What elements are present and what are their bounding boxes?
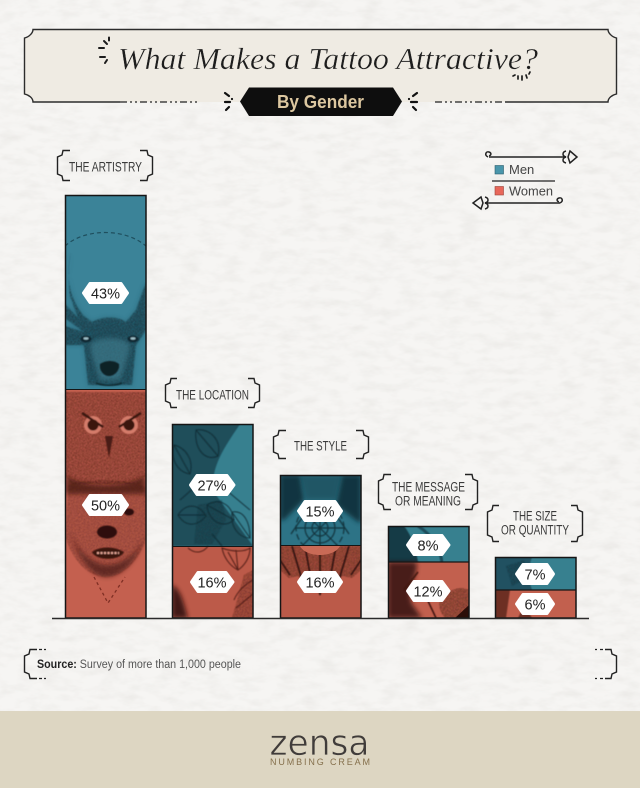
logo: zensa: zensa (270, 723, 370, 764)
title text: What Makes a Tattoo Attractive? (118, 41, 539, 76)
value label: men 8%: 8% (418, 538, 439, 554)
value label: women 50%: 50% (91, 498, 120, 514)
value label: men 43% (84, 284, 128, 302)
icon: title sparkles right (513, 72, 530, 80)
value label: women 12%: 12% (413, 584, 443, 600)
men segment 27 percent with floral tattoo (172, 424, 253, 546)
value label: men 27%: 27% (197, 478, 227, 494)
category label: the size or quantity: OR QUANTITY (501, 522, 569, 538)
icon: subtitle sparkles left (225, 93, 232, 110)
bar chart (52, 195, 589, 618)
source text: Source: Survey of more than 1,000 people (37, 659, 241, 671)
category label: the message or meaning (378, 474, 478, 510)
value label: men 15% (298, 502, 342, 520)
category label: the location: THE LOCATION (176, 388, 249, 402)
category label: the style (274, 430, 368, 458)
icon: legend top arrow (486, 151, 577, 163)
bar: the style (280, 475, 361, 618)
legend swatch: women (495, 186, 504, 195)
source box (24, 650, 616, 678)
legend label: men: Men (509, 162, 534, 177)
men segment 43 percent with deer illustration (65, 195, 146, 390)
value label: women 6%: 6% (525, 598, 546, 614)
value label: women 16% (192, 572, 233, 592)
value label: women 16%: 16% (305, 576, 335, 592)
category label: the artistry (58, 150, 152, 180)
value label: women 50% (84, 496, 128, 514)
women segment 16 percent with floral tattoo (172, 546, 253, 618)
icon: legend bottom arrow (473, 197, 562, 209)
men segment 8 percent (388, 526, 469, 562)
bar: the artistry (65, 195, 146, 618)
legend swatch: men (495, 166, 504, 174)
value label: men 27% (190, 476, 234, 494)
subtitle badge: By Gender (277, 92, 364, 112)
subtitle badge (240, 88, 402, 116)
women segment 16 percent with mandala tattoo (280, 546, 361, 618)
value label: men 7%: 7% (525, 568, 546, 584)
women segment 6 percent (495, 590, 576, 618)
icon: subtitle sparkles right (409, 93, 417, 110)
footer band (0, 711, 640, 788)
value label: women 16%: 16% (197, 576, 227, 592)
women segment 50 percent with owl and bear illustration (65, 390, 146, 618)
logo tagline: NUMBING CREAM (270, 757, 370, 767)
value label: men 15%: 15% (305, 504, 335, 520)
category label: the message or meaning: THE MESSAGE (392, 480, 465, 494)
category label: the message or meaning: OR MEANING (395, 494, 461, 508)
men segment 15 percent with mandala tattoo (281, 476, 360, 545)
value label: men 43%: 43% (91, 286, 120, 302)
women segment 12 percent (388, 562, 469, 618)
category label: the style: THE STYLE (294, 438, 347, 454)
category label: the location (166, 378, 260, 408)
legend divider (492, 180, 555, 182)
bar: the size or quantity (495, 557, 576, 618)
bar: the location (172, 424, 253, 618)
icon: title sparkles left (99, 38, 109, 63)
category label: the artistry: THE ARTISTRY (69, 160, 142, 174)
value label: women 16% (298, 572, 342, 592)
legend label: women: Women (509, 184, 553, 198)
legend (473, 151, 577, 209)
category label: the size or quantity (488, 506, 582, 542)
men segment 7 percent (495, 557, 576, 590)
title banner (24, 30, 616, 102)
chart baseline (52, 618, 589, 620)
category label: the size or quantity: THE SIZE (513, 508, 557, 524)
bar: the message or meaning (388, 526, 469, 618)
